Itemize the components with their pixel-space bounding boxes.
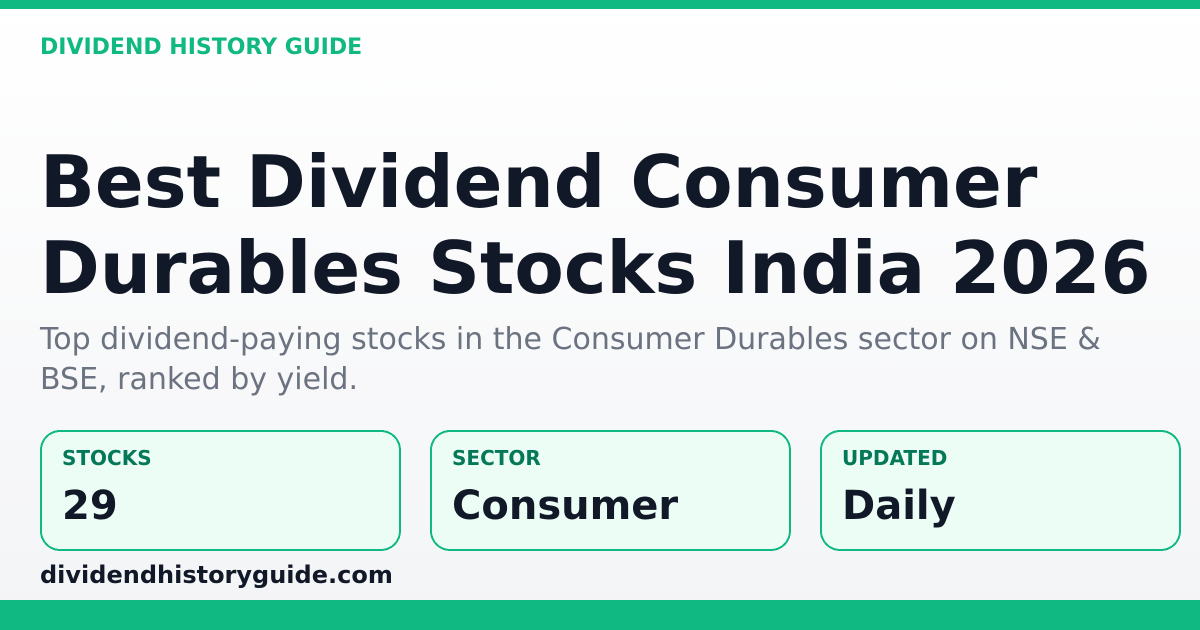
card: updated: [820, 430, 1181, 551]
stocks label: STOCKS: [62, 446, 152, 470]
stocks value: 29: [62, 483, 118, 529]
updated label: UPDATED: [842, 446, 947, 470]
sector label: SECTOR: [452, 446, 541, 470]
website url: dividendhistoryguide.com: [40, 561, 393, 589]
title: [40, 140, 1151, 310]
title: Best Dividend Consumer: [40, 140, 1037, 224]
bottom bar: [0, 600, 1200, 630]
title: Durables Stocks India 2026: [40, 226, 1151, 310]
updated value: Daily: [842, 483, 956, 529]
top bar: [0, 0, 1200, 9]
subtitle: Top dividend-paying stocks in the Consumer Durables sector on NSE &: [40, 322, 1101, 357]
card: stocks: [40, 430, 401, 551]
brand heading: DIVIDEND HISTORY GUIDE: [40, 35, 362, 60]
sector value: Consumer: [452, 483, 678, 529]
card: sector: [430, 430, 791, 551]
subtitle: BSE, ranked by yield.: [40, 362, 358, 397]
subtitle: [40, 322, 1101, 397]
